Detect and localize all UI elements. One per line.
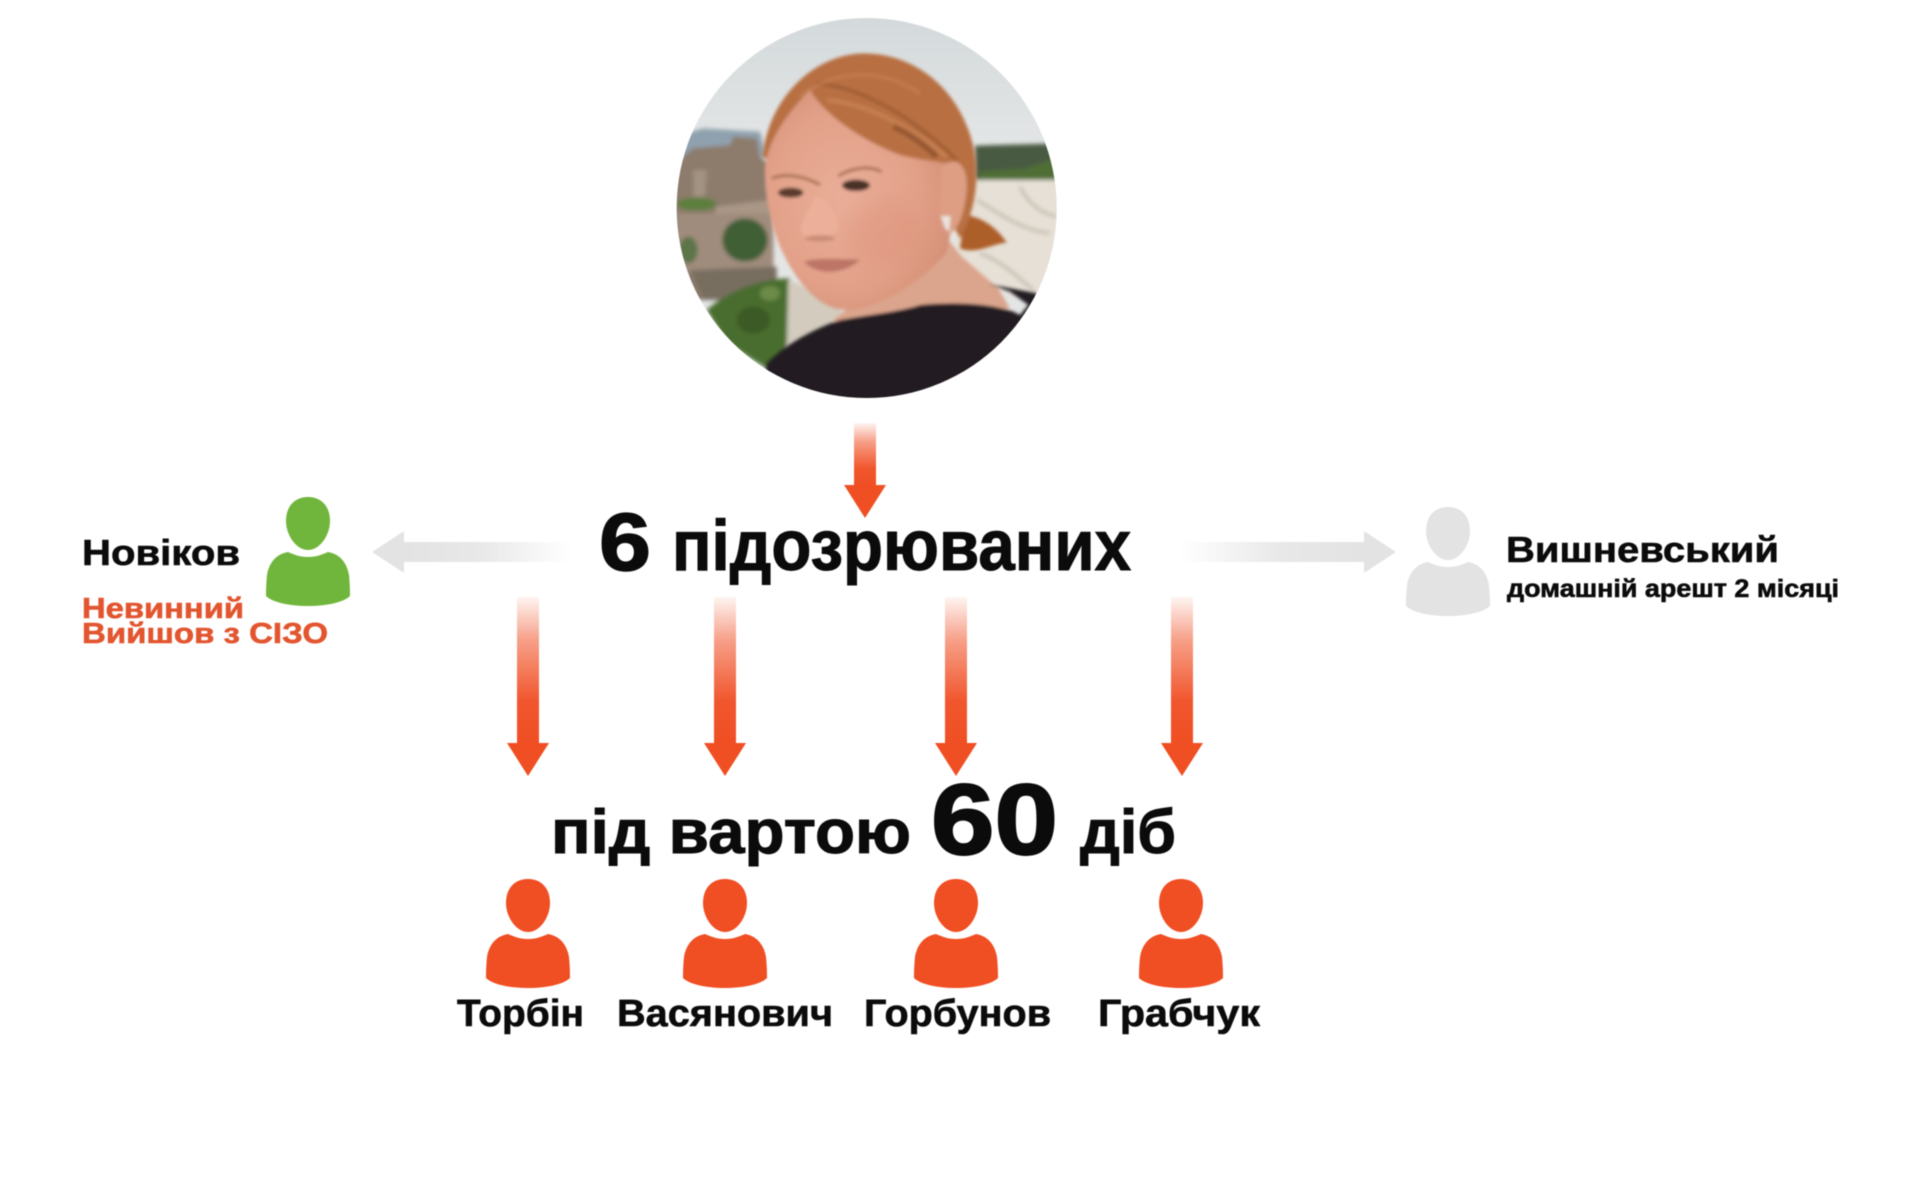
status: house arrest: домашній арешт 2 місяці — [1507, 575, 1839, 603]
subheading: in custody 60 days: під вартою — [551, 798, 911, 867]
name: Vasianovych: Васянович — [617, 993, 833, 1035]
arrow 4 — [1161, 597, 1203, 776]
icon: green person — [266, 497, 350, 606]
icon: grey person — [1406, 507, 1490, 616]
nose — [802, 208, 830, 236]
icon: person Hrabchuk — [1139, 879, 1223, 988]
arrow 2 — [704, 597, 746, 776]
heading: 6 suspects: підозрюваних — [672, 507, 1131, 586]
icon: person Torbin — [486, 879, 570, 988]
arrow 3 — [935, 597, 977, 776]
arrow 1 — [507, 597, 549, 776]
name: Torbin: Торбін — [457, 993, 584, 1035]
eyes — [778, 188, 803, 198]
subheading: in custody 60 days: діб — [1080, 798, 1176, 867]
name: Vyshnevskyi: Вишневський — [1506, 529, 1779, 570]
hair — [763, 53, 976, 238]
cheek — [860, 213, 892, 246]
heading: 6 suspects: 6 — [599, 497, 651, 588]
shirt — [764, 283, 1038, 399]
arrow: to Novikov — [372, 531, 572, 573]
ponytail — [960, 215, 1007, 250]
name: Novikov: Новіков — [82, 532, 240, 573]
neck — [833, 233, 1010, 328]
subheading: in custody 60 days — [551, 764, 1176, 876]
status: innocent, released: Невинний — [82, 593, 244, 625]
left block: Novikov — [82, 497, 572, 650]
face — [765, 90, 952, 310]
icon: person Vasianovych — [683, 879, 767, 988]
brows — [772, 176, 820, 185]
ear — [939, 162, 967, 233]
arrow: photo to heading — [844, 423, 886, 518]
subheading: in custody 60 days: 60 — [931, 764, 1058, 876]
status: innocent, released: Вийшов з СІЗО — [82, 618, 328, 650]
photo: portrait in circle — [673, 13, 1060, 403]
arrow: to Vyshnevskyi — [1180, 531, 1396, 573]
right block: Vyshnevskyi — [1180, 507, 1839, 616]
name: Horbunov: Горбунов — [864, 993, 1051, 1035]
arrows: heading to detainees — [507, 597, 1203, 776]
name: Hrabchuk: Грабчук — [1098, 993, 1261, 1035]
status: innocent, released — [82, 593, 328, 650]
mouth — [804, 259, 860, 272]
icon: person Horbunov — [914, 879, 998, 988]
